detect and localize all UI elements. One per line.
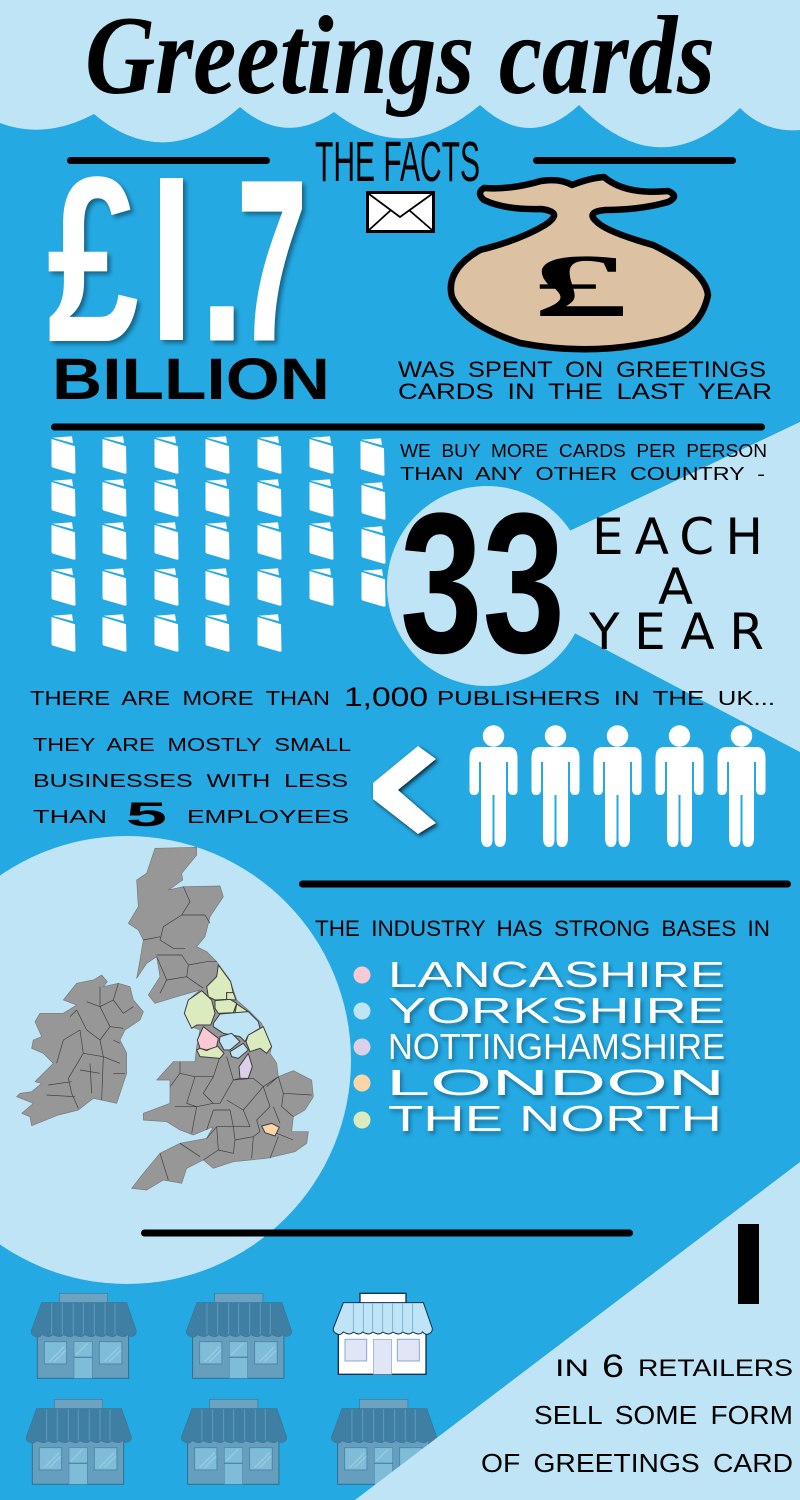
- header cloud band: [0, 0, 800, 147]
- text: was spent: [398, 357, 772, 404]
- text: 1 in 6 retailers: SELL SOME FORM: [534, 1400, 793, 1430]
- text: 1 in 6 retailers: 6: [602, 1348, 624, 1384]
- text: small businesses: THAN: [33, 807, 107, 827]
- shop 3: highlighted: [333, 1293, 432, 1374]
- big numeral: 1: 1: [700, 1199, 765, 1329]
- legend item: Yorkshire: YORKSHIRE: [388, 990, 725, 1031]
- legend item: London: [354, 1062, 725, 1103]
- text: was spent: WAS SPENT ON GREETINGS: [398, 357, 766, 382]
- big numeral: 1: [738, 1224, 759, 1304]
- text: publishers: [30, 682, 775, 712]
- map: Yorkshire (blue): [213, 1012, 260, 1058]
- text: publishers: PUBLISHERS IN THE UK...: [437, 688, 775, 710]
- big number: £1.7: £: [47, 128, 139, 392]
- text: industry bases: THE INDUSTRY HAS STRONG BASES IN: [315, 916, 770, 941]
- subtitle: the facts: THE FACTS: [315, 130, 480, 194]
- shop 1: [31, 1293, 136, 1378]
- text: small businesses: 5: [126, 796, 167, 834]
- divider right: [533, 157, 736, 164]
- divider: [299, 880, 791, 888]
- shop 5: [181, 1399, 287, 1484]
- pictogram: five people: [470, 725, 766, 847]
- legend item: The North: THE NORTH: [388, 1098, 722, 1139]
- map: Lancashire (pink): [197, 1027, 218, 1050]
- big number: 33: 33: [400, 472, 565, 695]
- text: 1 in 6 retailers: OF GREETINGS CARD: [481, 1448, 793, 1478]
- text: each a year: EACH: [592, 508, 763, 566]
- legend item: Lancashire: [354, 954, 725, 995]
- text: small businesses: THEY ARE MOSTLY SMALL: [33, 735, 351, 755]
- text: publishers: 1,000: [344, 682, 428, 712]
- pictogram: six shops: [26, 1293, 437, 1484]
- map of UK and Ireland: [17, 847, 313, 1190]
- text: small businesses: EMPLOYEES: [187, 807, 349, 827]
- text: each a year: [588, 508, 764, 661]
- legend item: London: LONDON: [386, 1062, 725, 1103]
- shop 2: [186, 1293, 292, 1378]
- shop 6: [331, 1399, 437, 1484]
- icon: envelope: [368, 192, 434, 232]
- big number: £1.7: 1: [120, 127, 251, 390]
- background shape: right triangle: [470, 422, 800, 752]
- text: we buy more: WE BUY MORE CARDS PER PERSON: [400, 441, 767, 461]
- map: Ireland: [17, 975, 143, 1126]
- map: Nottinghamshire (lilac): [239, 1053, 252, 1078]
- big number: £1.7: 7: [238, 136, 306, 386]
- text: 1 in 6 retailers: [481, 1348, 793, 1478]
- big number: £1.7: [48, 176, 308, 347]
- background shape: bottom right triangle: [355, 1162, 800, 1500]
- divider: [141, 1230, 633, 1236]
- background shape: circle behind 33: [387, 486, 587, 686]
- text: 1 in 6 retailers: RETAILERS: [638, 1355, 793, 1382]
- icon: money bag: [451, 177, 708, 349]
- legend item: The North: [354, 1098, 722, 1139]
- divider left: [67, 157, 270, 164]
- text: each a year: A: [658, 558, 693, 616]
- text: each a year: YEAR: [588, 603, 764, 661]
- map: London (peach): [262, 1123, 279, 1136]
- text: small businesses: BUSINESSES WITH LESS: [33, 771, 348, 791]
- text: we buy more: [400, 441, 767, 484]
- legend item: Lancashire: LANCASHIRE: [388, 954, 725, 995]
- legend: regions: [354, 954, 725, 1139]
- text: we buy more: THAN ANY OTHER COUNTRY -: [400, 464, 765, 484]
- divider: [51, 424, 765, 430]
- legend item: Nottinghamshire: NOTTINGHAMSHIRE: [388, 1026, 725, 1067]
- map: North region (green): [184, 965, 272, 1058]
- pictogram: 33 cards: [52, 436, 386, 652]
- background shape: map circle: [0, 836, 351, 1284]
- legend item: Yorkshire: [354, 990, 725, 1031]
- icon: less-than chevron: [373, 746, 436, 834]
- text: publishers: THERE ARE MORE THAN: [30, 688, 330, 710]
- map: Great Britain: [128, 847, 313, 1190]
- shop 4: [26, 1399, 131, 1484]
- text: was spent: CARDS IN THE LAST YEAR: [398, 379, 772, 404]
- big number: £1.7: .: [201, 149, 243, 384]
- label: billion: BILLION: [52, 347, 330, 412]
- icon: pound sign on bag: £: [532, 237, 629, 336]
- text: 1 in 6 retailers: IN: [555, 1355, 589, 1382]
- text: small businesses: [33, 735, 351, 834]
